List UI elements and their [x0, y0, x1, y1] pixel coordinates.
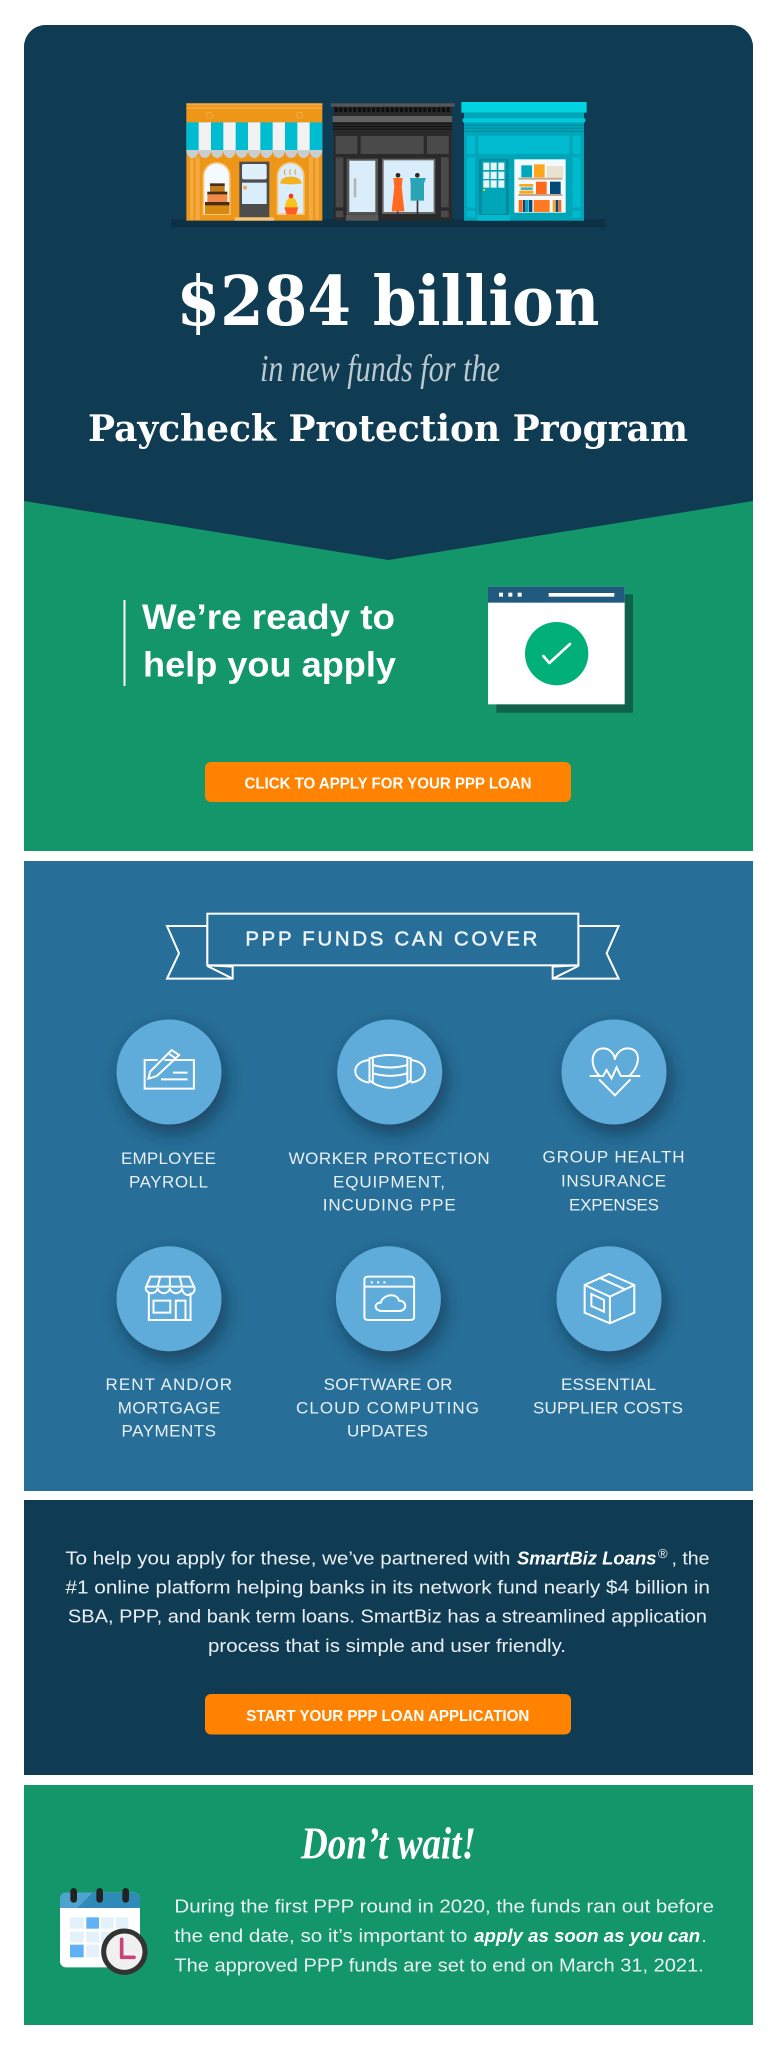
ribbon heading: PPP FUNDS CAN COVER — [245, 929, 537, 951]
button: start application: START YOUR PPP LOAN APPLICATION — [246, 1708, 529, 1725]
button: apply — [205, 762, 571, 802]
heading: amount: $284 billion — [176, 262, 600, 342]
dark chevron header — [24, 25, 753, 560]
item: essential supplier: ESSENTIAL — [561, 1375, 656, 1394]
item: software or cloud: SOFTWARE OR — [324, 1375, 452, 1394]
item: employee payroll — [116, 1020, 222, 1191]
icon: book shop — [461, 102, 587, 221]
text block: partnership: process that is simple and user friendly. — [208, 1635, 566, 1656]
icon: bakery shop — [186, 103, 322, 221]
button: start application — [205, 1694, 571, 1734]
text block: partnership: To help you apply for these, we’ve partnered with — [65, 1548, 510, 1568]
text block: deadline: the end date, so it’s important to — [174, 1925, 467, 1946]
heading: ready to help: help you apply — [143, 646, 397, 684]
item: rent and mortgage — [106, 1246, 232, 1441]
item: worker protection — [289, 1020, 490, 1215]
item: rent and mortgage: MORTGAGE — [118, 1398, 220, 1417]
panel: don't wait — [24, 1785, 753, 2025]
heading: don't wait: Don’t wait! — [300, 1818, 476, 1868]
text block: deadline: During the first PPP round in 2020, the funds ran out before — [174, 1896, 714, 1917]
item: group health: GROUP HEALTH — [542, 1148, 684, 1167]
panel: hero — [24, 25, 753, 851]
text block: partnership: SmartBiz Loans — [517, 1548, 656, 1568]
item: software or cloud: CLOUD COMPUTING — [296, 1398, 479, 1417]
text: script subtitle: in new funds for the — [260, 348, 500, 390]
text block: partnership: SBA, PPP, and bank term loans. SmartBiz has a streamlined application — [68, 1606, 707, 1627]
item: rent and mortgage: PAYMENTS — [122, 1422, 216, 1441]
panel: SmartBiz partnership — [24, 1500, 753, 1775]
panel: PPP funds can cover — [24, 861, 753, 1491]
item: employee payroll: EMPLOYEE — [121, 1149, 216, 1168]
illustration: storefronts — [171, 102, 605, 227]
text block: deadline: The approved PPP funds are set to end on March 31, 2021. — [174, 1955, 704, 1976]
item: worker protection: WORKER PROTECTION — [289, 1149, 490, 1168]
divider bar — [124, 600, 126, 686]
item: essential supplier — [533, 1246, 683, 1417]
item: worker protection: INCUDING PPE — [323, 1196, 456, 1215]
text block: partnership: ® — [658, 1546, 668, 1561]
item: essential supplier: SUPPLIER COSTS — [533, 1398, 683, 1417]
text block: deadline: apply as soon as you can — [474, 1925, 700, 1946]
icon: browser window with check — [488, 587, 633, 713]
text block: partnership: , the — [672, 1548, 710, 1568]
text block: deadline: . — [702, 1925, 707, 1946]
item: employee payroll: PAYROLL — [129, 1172, 208, 1191]
item: group health — [542, 1020, 684, 1215]
item: rent and mortgage: RENT AND/OR — [106, 1375, 232, 1394]
heading: program name: Paycheck Protection Program — [88, 407, 688, 450]
item: group health: EXPENSES — [569, 1196, 659, 1215]
icon: calendar with clock — [60, 1888, 145, 1972]
text block: partnership — [65, 1546, 710, 1656]
heading: ready to help — [142, 598, 397, 684]
item: software or cloud: UPDATES — [347, 1422, 428, 1441]
text block: partnership: #1 online platform helping banks in its network fund nearly $4 billion in — [65, 1577, 710, 1598]
heading: ready to help: We’re ready to — [142, 598, 395, 637]
item: worker protection: EQUIPMENT, — [333, 1172, 445, 1191]
ribbon heading — [167, 914, 619, 979]
text block: deadline — [174, 1896, 714, 1976]
icon: clothing shop — [331, 103, 455, 221]
item: software or cloud — [296, 1246, 479, 1441]
item: group health: INSURANCE — [561, 1172, 666, 1191]
button: apply: CLICK TO APPLY FOR YOUR PPP LOAN — [244, 776, 532, 792]
